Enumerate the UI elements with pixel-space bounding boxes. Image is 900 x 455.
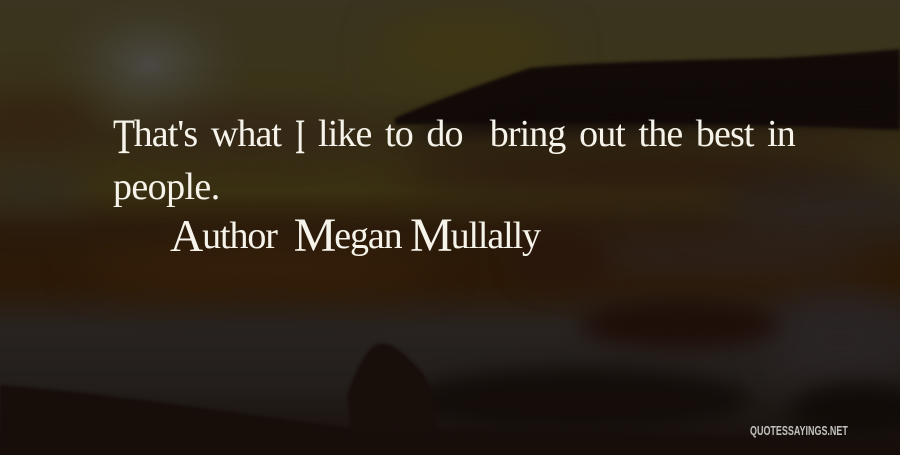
author attribution: M: [294, 209, 335, 262]
tree silhouette: [347, 344, 436, 433]
quote line 1: T: [113, 108, 134, 164]
quote line 2: people.: [113, 166, 220, 208]
author attribution: M: [410, 209, 452, 262]
watermark: QUOTESSAYINGS.NET: [750, 423, 848, 438]
quote line 1: hat's what like to do bring out the best in: [134, 113, 795, 155]
quote text: [113, 108, 796, 208]
author attribution: uthor egan ullally: [202, 215, 540, 257]
quote line 1: I: [295, 108, 304, 164]
author attribution: A: [170, 210, 202, 261]
